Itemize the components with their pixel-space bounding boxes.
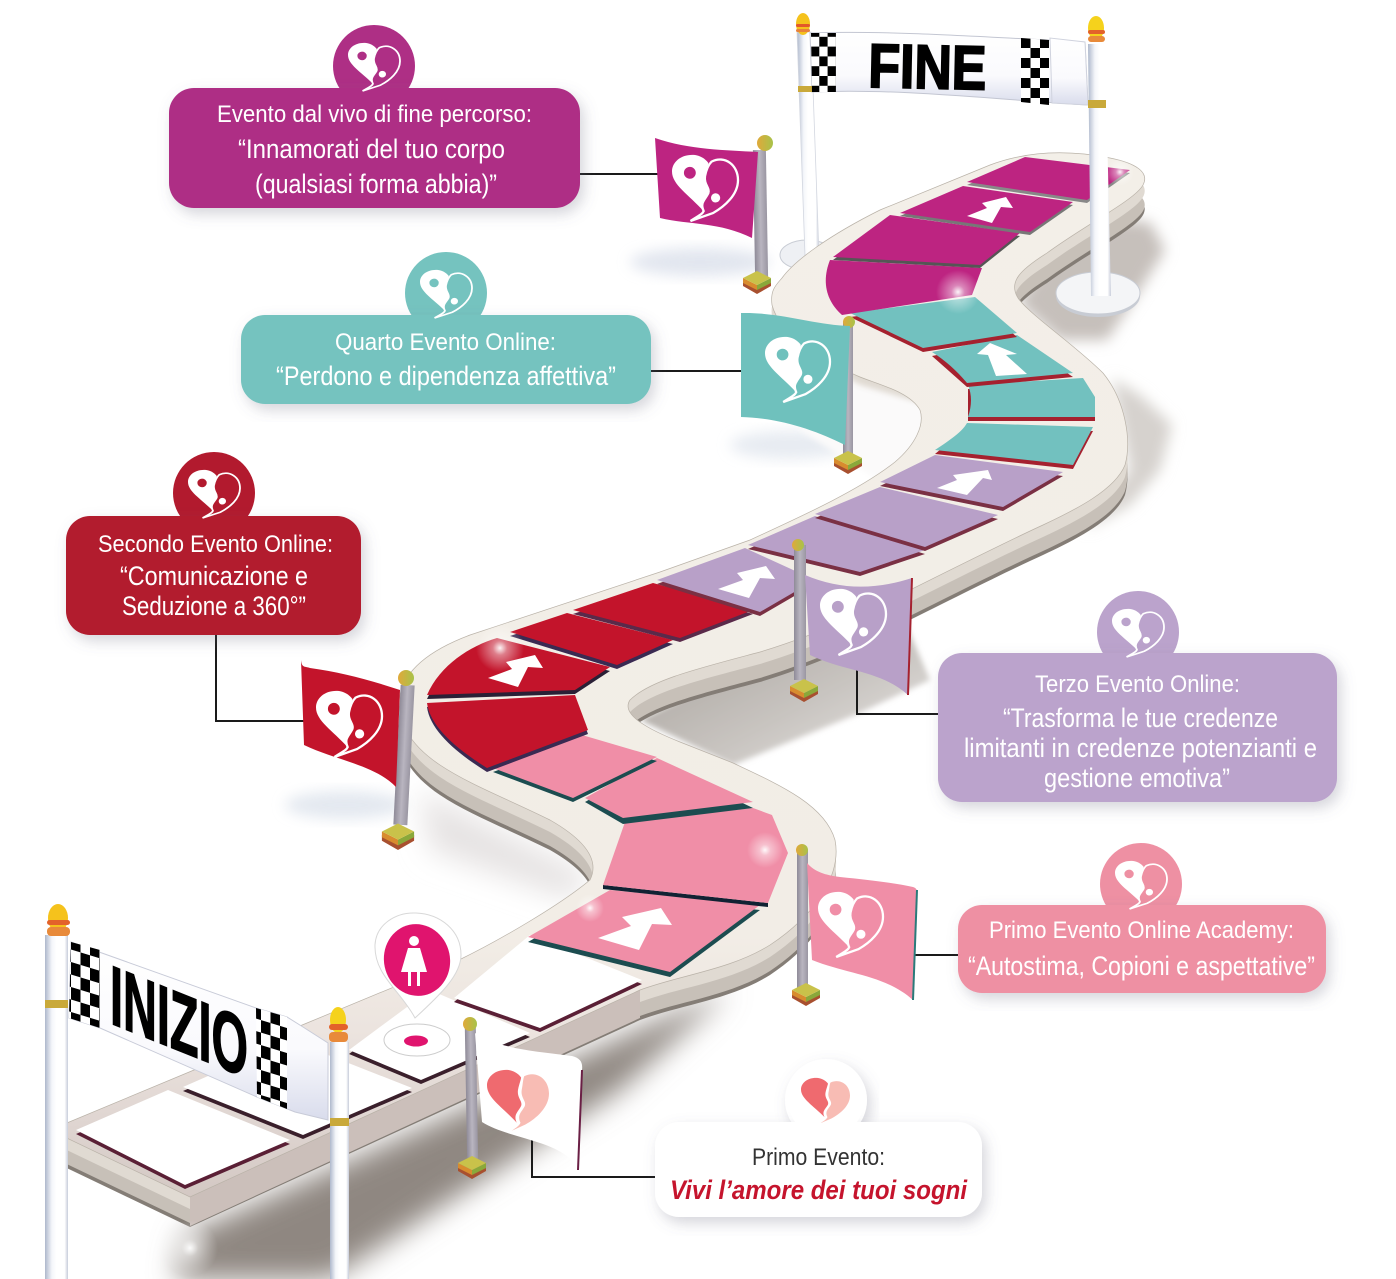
panel text: “Autostima, Copioni e aspettative” — [968, 951, 1315, 981]
red tiles — [427, 583, 753, 772]
panel: fourth online event — [241, 252, 651, 404]
panel text: limitanti in credenze potenzianti e — [964, 733, 1317, 763]
flag: pink — [792, 844, 917, 1006]
teal tiles — [850, 297, 1095, 469]
flag: magenta — [655, 135, 773, 294]
back finish post and banner — [780, 13, 1088, 270]
panel text: “Perdono e dipendenza affettiva” — [276, 361, 616, 391]
FINE label: FINE — [868, 32, 987, 103]
front finish post — [1050, 16, 1140, 317]
sparkles — [162, 158, 1134, 1276]
map pin marker — [375, 913, 461, 1056]
panel text — [964, 671, 1317, 793]
start banner — [69, 942, 328, 1120]
panel text: gestione emotiva” — [1044, 763, 1230, 793]
road — [50, 153, 1145, 1227]
panel text: “Comunicazione e — [120, 561, 308, 591]
ground shadows — [175, 220, 1172, 1279]
panel text: Evento dal vivo di fine percorso: — [217, 101, 532, 128]
panel text: Primo Evento Online Academy: — [989, 917, 1294, 944]
panel text — [670, 1144, 967, 1205]
pink tiles — [493, 735, 788, 977]
panel: final live event — [169, 25, 580, 208]
panel text — [98, 531, 333, 621]
panel text: “Trasforma le tue credenze — [1003, 703, 1278, 733]
lilac tiles — [657, 455, 1063, 616]
panel text: (qualsiasi forma abbia)” — [255, 169, 497, 199]
white tiles — [76, 935, 642, 1189]
connector lines — [216, 174, 958, 1177]
start post right — [329, 1007, 349, 1279]
panel: first online event academy — [958, 843, 1326, 993]
arrows on tiles — [488, 197, 1027, 950]
INIZIO label: INIZIO — [110, 948, 248, 1096]
start post left — [45, 904, 70, 1279]
panel: first event — [655, 1059, 982, 1217]
panel text: Terzo Evento Online: — [1035, 671, 1240, 698]
panel text: Primo Evento: — [752, 1144, 885, 1171]
icon: two-tone heart — [801, 1078, 850, 1123]
flag: lilac — [790, 539, 912, 702]
panel text: Vivi l’amore dei tuoi sogni — [670, 1175, 967, 1205]
panel: second online event — [66, 452, 361, 635]
panel text — [217, 101, 532, 199]
panel: third online event — [938, 591, 1337, 802]
panel text: Secondo Evento Online: — [98, 531, 333, 558]
panel text: Quarto Evento Online: — [335, 329, 556, 356]
panel text: “Innamorati del tuo corpo — [238, 134, 505, 164]
flag: red — [301, 660, 415, 850]
panel text — [276, 329, 616, 391]
panel text: Seduzione a 360°” — [122, 591, 306, 621]
magenta tiles — [826, 157, 1130, 315]
flag: teal — [741, 313, 862, 474]
icon: two-tone heart — [487, 1070, 549, 1131]
flag: white — [458, 1017, 582, 1179]
panel text — [968, 917, 1315, 981]
